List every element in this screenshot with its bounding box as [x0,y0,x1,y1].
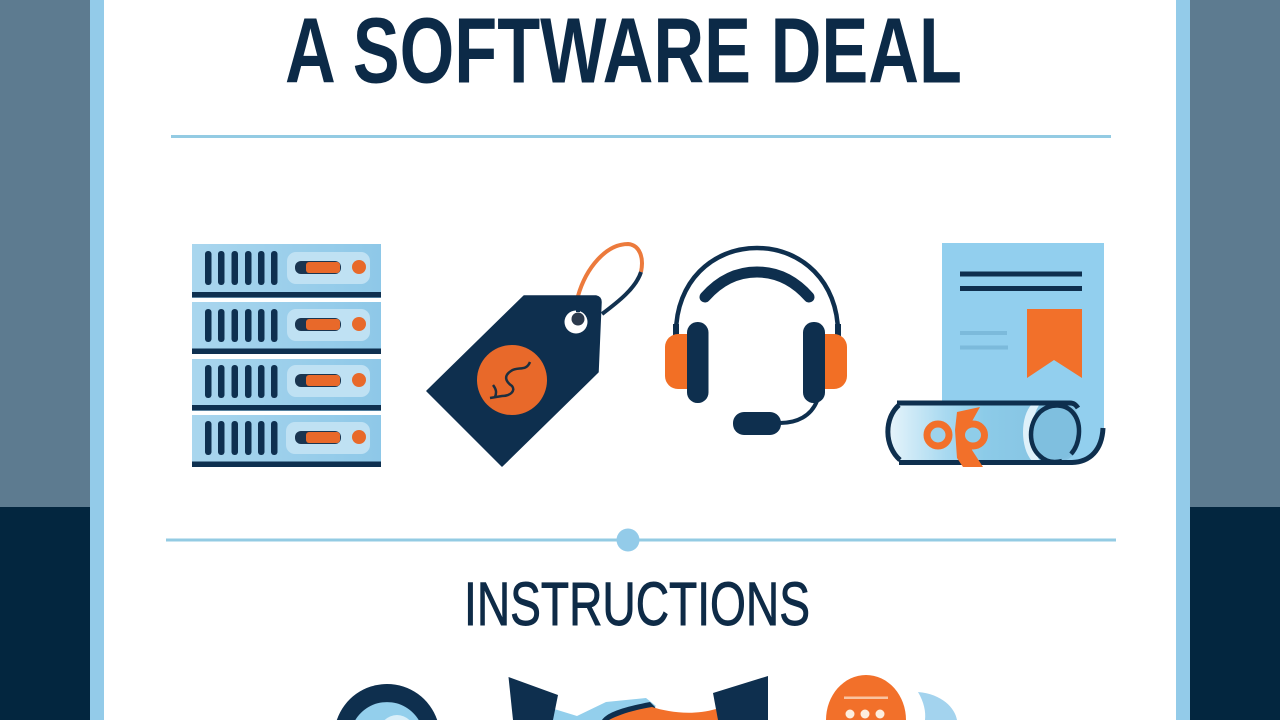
icon: magnifier ring [337,684,437,720]
heading: instructions: INSTRUCTIONS [464,570,810,638]
title: A SOFTWARE DEAL [285,0,962,102]
icon: chat bubbles [826,675,957,720]
divider dot [616,528,640,552]
icon: server rack [192,244,381,467]
icon: handshake [508,676,768,720]
icon: headset [665,248,847,435]
icon: price tag [427,244,642,466]
icon: document scroll with bookmark [888,243,1104,467]
